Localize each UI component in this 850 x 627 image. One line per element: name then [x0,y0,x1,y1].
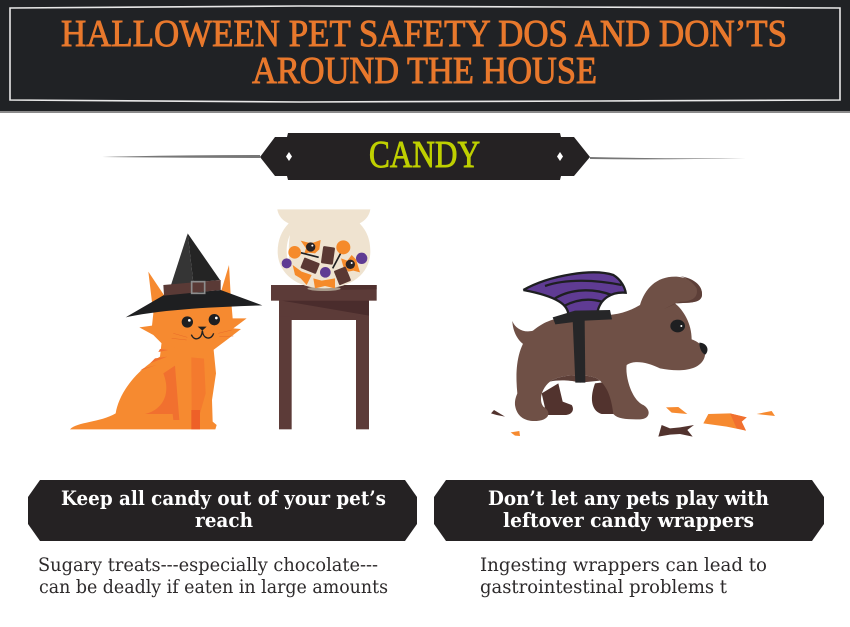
icon: harness and bat wing [523,272,626,383]
illustration: dog with bat wings and candy wrappers [491,272,775,437]
icon: candy wrappers [491,407,775,437]
panel: no candy wrappers: leftover candy wrappers [503,508,754,532]
text block: sugary treats: Sugary treats---especially chocolate--- [38,554,378,576]
title: HALLOWEEN PET SAFETY DOS AND DON’TS [61,13,787,55]
panel: keep candy out of reach [28,480,417,541]
section heading: candy [102,133,746,180]
panel: keep candy out of reach: reach [195,508,253,532]
text block: ingesting wrappers: Ingesting wrappers can lead to [480,554,767,576]
panel: no candy wrappers [434,480,824,541]
title [61,13,787,92]
text block: ingesting wrappers: gastrointestinal problems t [480,576,727,598]
icon: candy jar [277,209,370,291]
illustration: cat in witch hat beside candy jar on table [70,209,377,429]
panel: keep candy out of reach: Keep all candy out of your pet’s [61,486,386,510]
title: AROUND THE HOUSE [252,50,597,92]
panel: no candy wrappers: Don’t let any pets play with [488,486,769,510]
icon: dog [512,276,707,421]
icon: cat [70,265,247,429]
section heading: candy: CANDY [369,134,480,176]
text block: ingesting wrappers [480,554,767,598]
icon: witch hat [126,233,262,317]
icon: table [271,285,377,429]
text block: sugary treats [38,554,388,598]
text block: sugary treats: can be deadly if eaten in large amounts [39,576,388,598]
header banner [0,0,850,113]
